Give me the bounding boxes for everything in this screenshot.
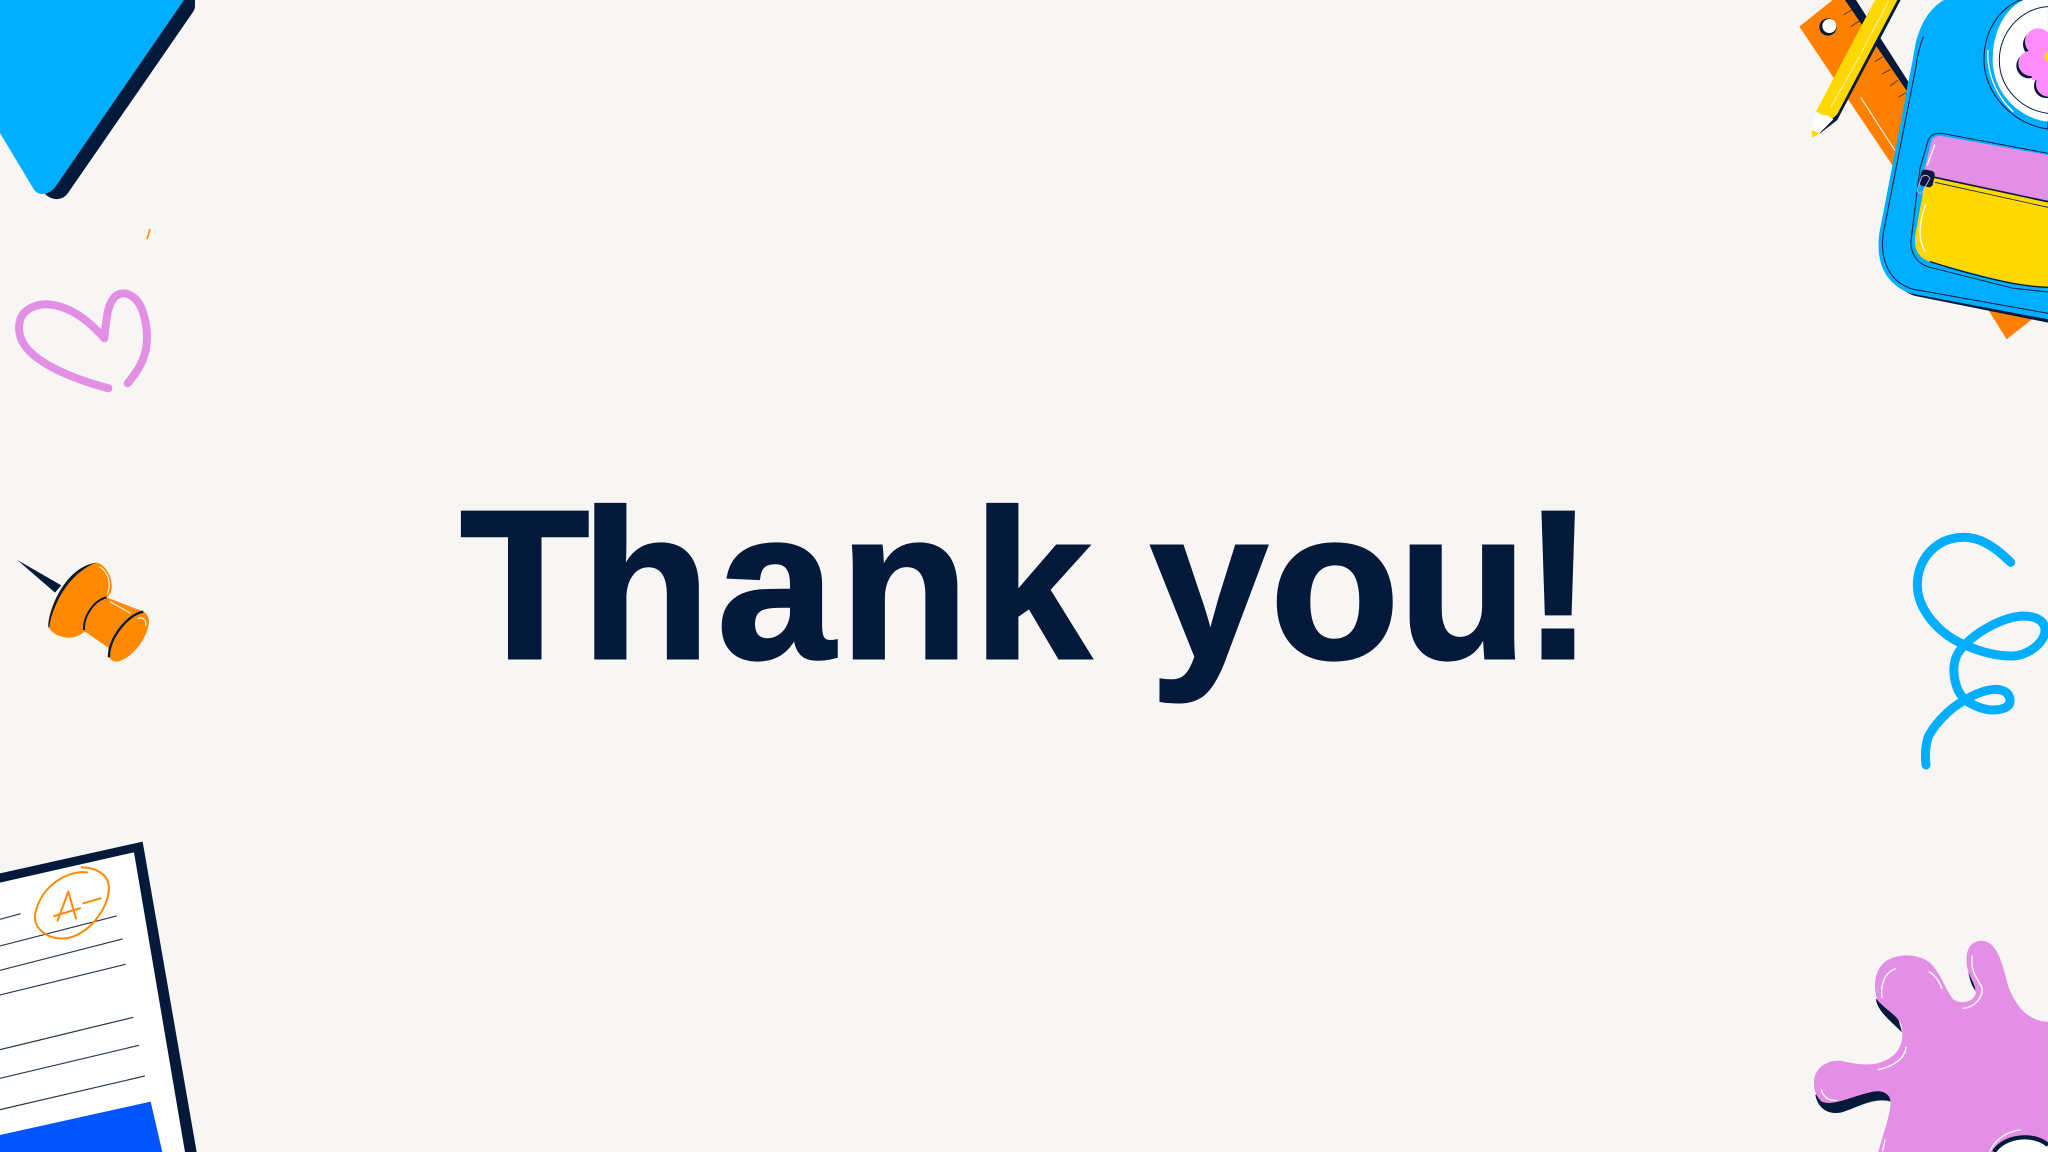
- backpack shadow: [1903, 289, 2048, 323]
- pocket pink flap: [1923, 136, 2048, 203]
- backpack body: [1879, 0, 2048, 319]
- backpack inner seam: [1883, 37, 2048, 313]
- icon: orange push pin: [17, 560, 149, 662]
- pocket yellow body: [1915, 177, 2048, 287]
- splat shadow: [1815, 972, 1978, 1113]
- icon: small orange mark: [147, 229, 150, 239]
- zipper pull: [1918, 169, 1936, 188]
- paper sheet: [0, 852, 185, 1152]
- ruler dark edge: [1845, 0, 1908, 91]
- paper frame: [0, 842, 197, 1152]
- ruler: [1799, 0, 2033, 339]
- zipper: [1932, 177, 2048, 202]
- orange grade circle: [35, 867, 109, 939]
- text lines: [0, 914, 145, 1110]
- flower: [2016, 28, 2048, 98]
- icon: blue folder corner top left: [0, 0, 195, 199]
- splat highlights: [1821, 956, 2020, 1151]
- splat bottom hole: [1993, 1135, 2048, 1152]
- splat body: [1814, 941, 2048, 1152]
- icon: graded paper with A minus: [0, 842, 197, 1152]
- pocket outline: [1911, 133, 2048, 292]
- pocket highlights: [1920, 145, 1935, 252]
- icon: pink hand-drawn heart: [19, 293, 147, 388]
- ruler hole: [1819, 18, 1837, 36]
- ruler ticks: [1843, 10, 1906, 97]
- icon: backpack with ruler and pencil: [1799, 0, 2048, 339]
- badge: [1984, 0, 2048, 129]
- pencil: [1819, 0, 1901, 134]
- title: Thank you!: [460, 466, 1594, 703]
- blue footer block: [0, 1102, 162, 1152]
- icon: blue squiggle: [1917, 537, 2045, 765]
- icon: pink paint splat: [1814, 941, 2048, 1152]
